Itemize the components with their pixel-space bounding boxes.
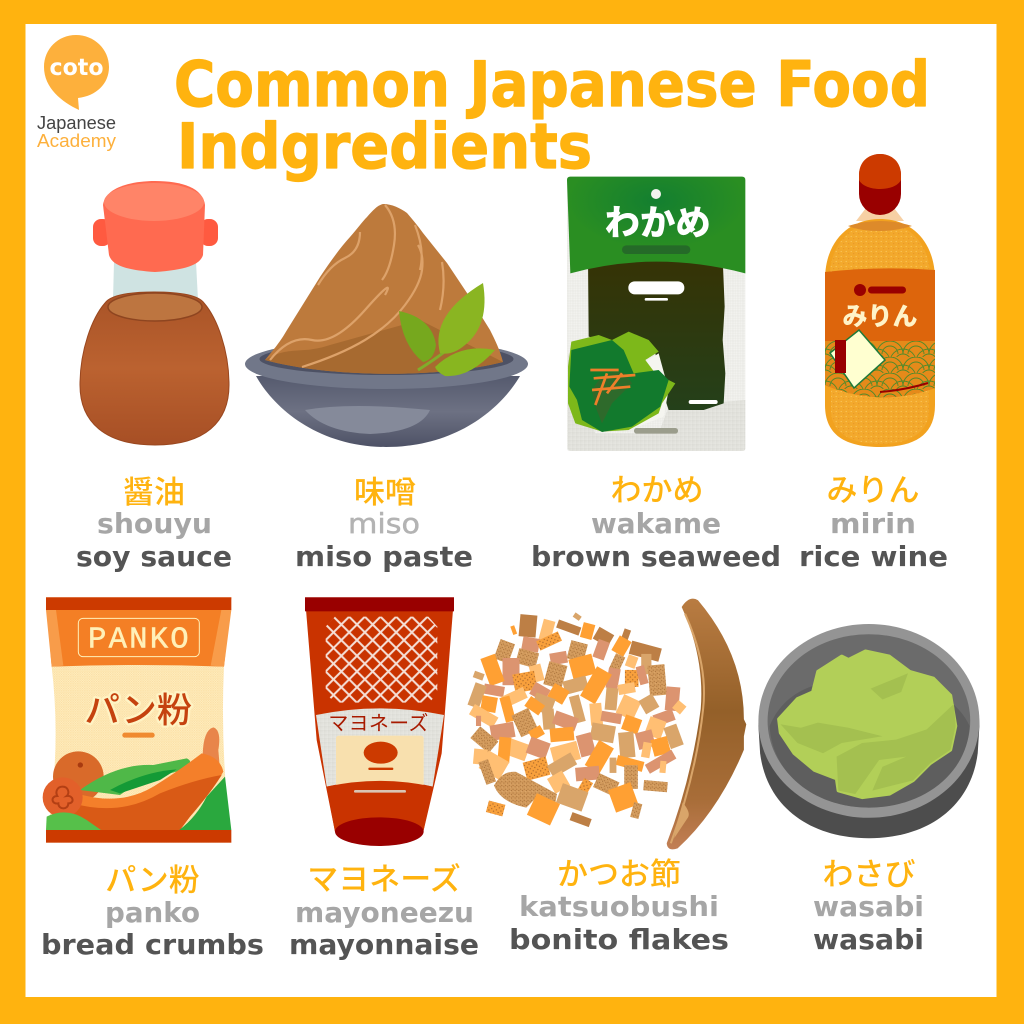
label: mayoneezu: mayoneezu: [295, 896, 474, 929]
icon: miso paste in bowl: [245, 204, 528, 447]
label: miso: miso paste: [295, 540, 473, 573]
icon: soy sauce bottle: [80, 181, 229, 445]
panel: wakame: [531, 177, 781, 573]
panel: mirin: [799, 154, 948, 573]
label: katsuobushi: katsuobushi: [519, 890, 719, 923]
icon: panko bag: パン粉: [84, 692, 192, 731]
label: shouyu: 醤油: [123, 475, 185, 510]
label: mirin: mirin: [830, 507, 916, 540]
label: wakame: wakame: [591, 507, 721, 540]
label: katsuobushi: かつお節: [557, 857, 681, 892]
label: panko: パン粉: [105, 863, 200, 898]
icon: mayonnaise tube: マヨネーズ: [328, 712, 428, 735]
panel: wasabi: [758, 624, 979, 956]
icon: wakame package: [567, 177, 745, 451]
logo text Academy: Academy: [37, 131, 116, 151]
label: wasabi: wasabi: [813, 890, 924, 923]
label: mirin: rice wine: [799, 540, 948, 573]
panel: shouyu: [76, 181, 232, 573]
label: shouyu: [76, 475, 232, 573]
label: wakame: brown seaweed: [531, 540, 781, 573]
label: mayoneezu: mayonnaise: [289, 928, 479, 961]
icon: mirin bottle: みりん: [842, 303, 918, 331]
title: Indgredients: [177, 110, 592, 183]
label: miso: [295, 475, 473, 573]
icon: panko bag: PANKO: [88, 622, 189, 657]
label: wakame: わかめ: [610, 473, 704, 508]
label: mayoneezu: [289, 862, 479, 961]
logo text Japanese: Japanese: [37, 113, 116, 133]
icon: panko bag: [43, 597, 231, 843]
label: mirin: みりん: [826, 473, 920, 508]
icon: wasabi in stone bowl: [758, 624, 979, 838]
label: wasabi: wasabi: [813, 923, 924, 956]
label: wasabi: [813, 857, 924, 956]
panel: panko: [41, 597, 264, 961]
icon: mayonnaise tube: [305, 597, 454, 846]
label: miso: 味噌: [354, 475, 416, 510]
icon: mirin bottle: [825, 154, 935, 447]
label: katsuobushi: bonito flakes: [509, 923, 729, 956]
panel: mayoneezu: [289, 597, 479, 961]
label: mirin: [799, 473, 948, 573]
icon: katsuobushi dried bonito block: [667, 599, 746, 849]
title: [174, 48, 930, 183]
label: mayoneezu: マヨネーズ: [307, 862, 461, 897]
logo wordmark coto: coto: [50, 55, 104, 81]
title: Common Japanese Food: [174, 48, 930, 121]
logo: [37, 35, 116, 151]
panel: miso: [245, 204, 528, 573]
icon: bonito flakes pile: [467, 612, 686, 827]
label: panko: bread crumbs: [41, 928, 264, 961]
label: wakame: [531, 473, 781, 573]
label: panko: [41, 863, 264, 961]
label: wasabi: わさび: [822, 857, 916, 892]
label: shouyu: shouyu: [97, 507, 212, 540]
panel: katsuobushi: [467, 599, 746, 956]
icon: wakame package: わかめ: [605, 204, 711, 243]
label: miso: miso: [348, 507, 420, 540]
icon: speech bubble: [44, 35, 109, 110]
label: katsuobushi: [509, 857, 729, 956]
label: panko: panko: [105, 896, 200, 929]
label: shouyu: soy sauce: [76, 540, 232, 573]
